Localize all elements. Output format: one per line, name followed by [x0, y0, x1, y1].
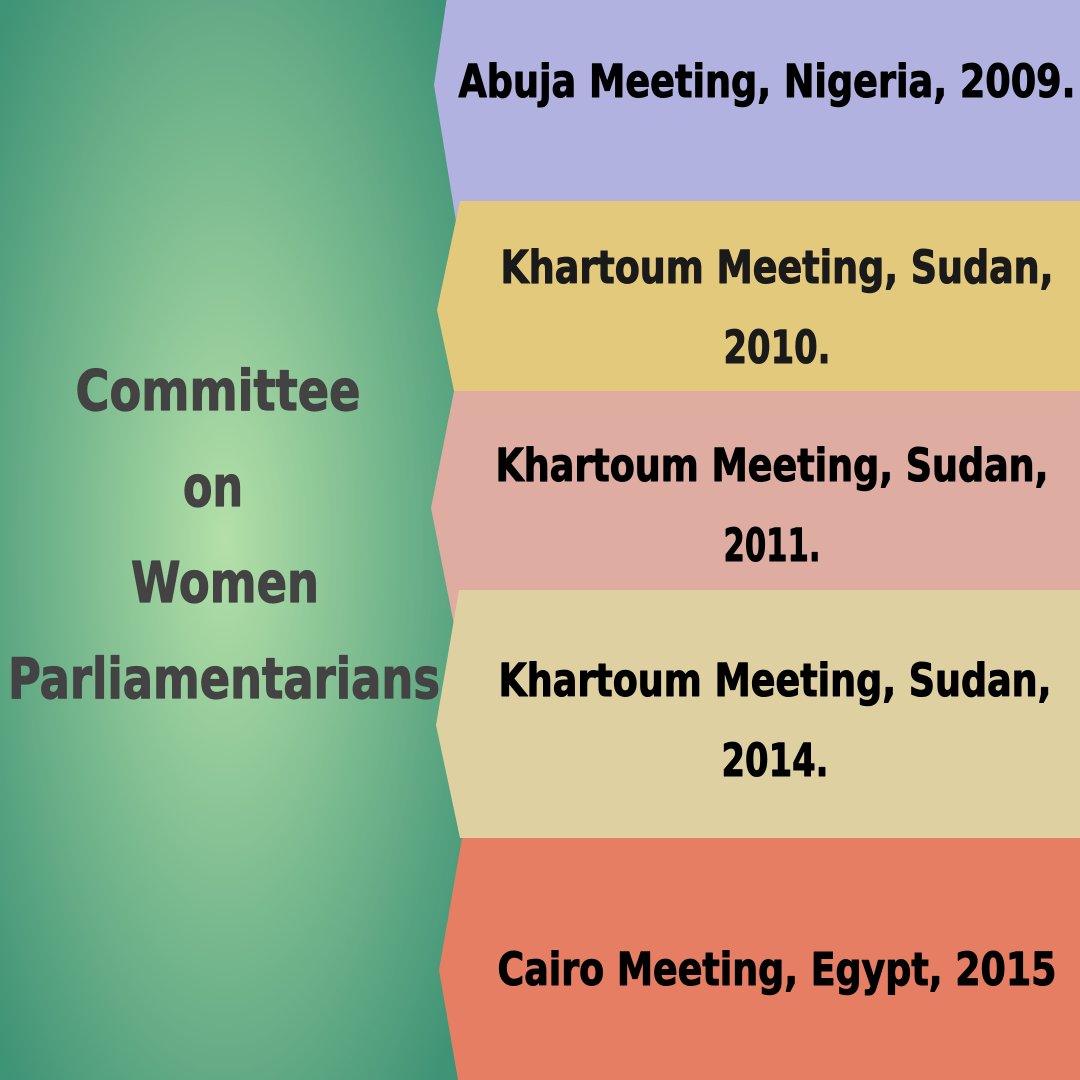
panel: Khartoum 2011: 2011.: [724, 519, 820, 572]
panel: Abuja 2009: [434, 0, 1080, 240]
panel: Khartoum 2014: 2014.: [722, 734, 828, 787]
panel: Khartoum 2010: [437, 201, 1080, 391]
panel: Khartoum 2011: [431, 391, 1080, 640]
panel: Khartoum 2010: 2010.: [724, 321, 830, 374]
title: Committee on Women Parliamentarians: [8, 359, 440, 712]
title: Committee on Women Parliamentarians: Women: [131, 551, 319, 616]
panel: Cairo 2015: [439, 838, 1080, 1080]
title: Committee on Women Parliamentarians: on: [183, 455, 243, 520]
title: Committee on Women Parliamentarians: Parliamentarians: [8, 647, 440, 712]
title: Committee on Women Parliamentarians: Committee: [76, 359, 360, 424]
panel: Khartoum 2014: [436, 590, 1080, 838]
